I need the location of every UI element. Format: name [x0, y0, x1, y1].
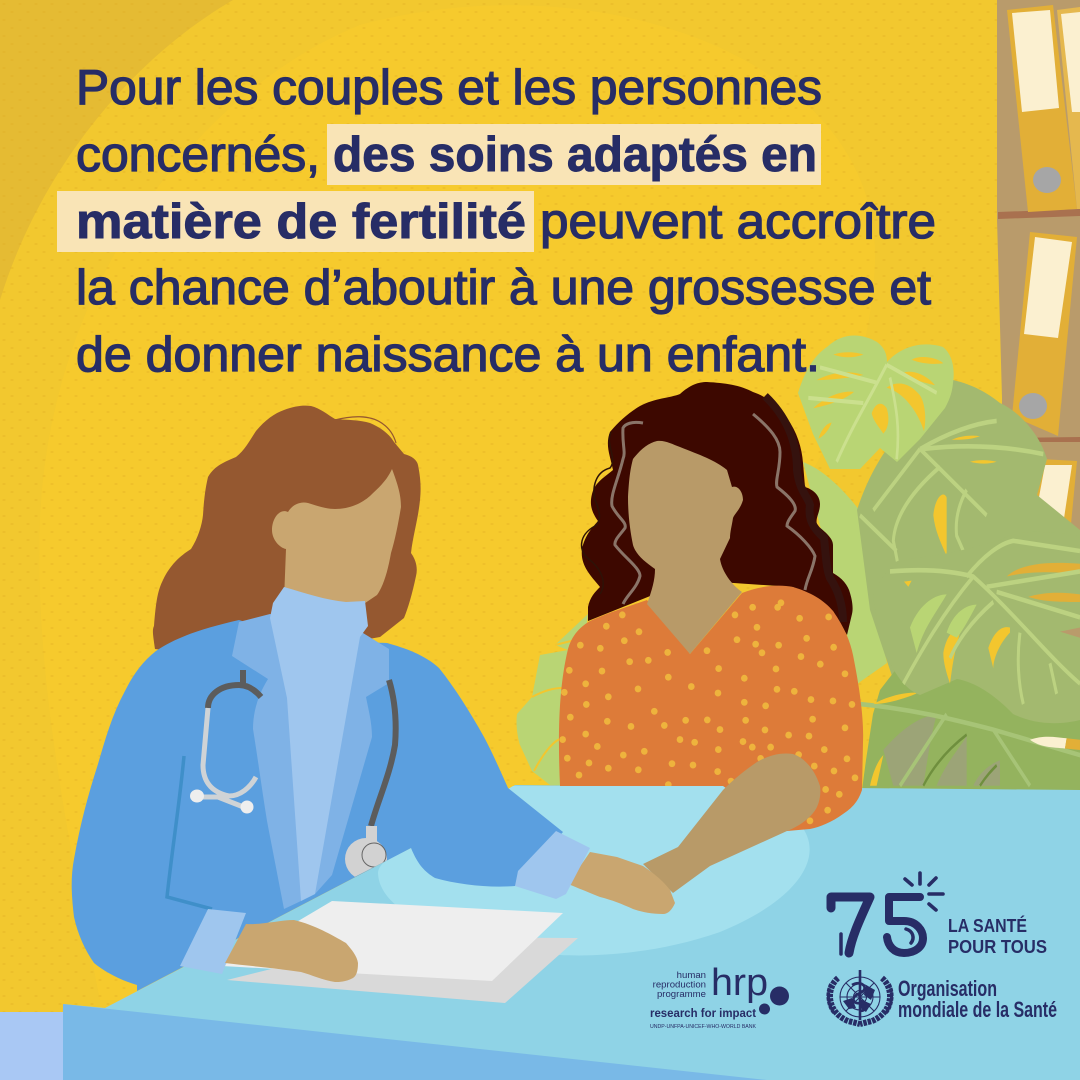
doctor — [72, 406, 563, 991]
shelf boards — [998, 209, 1080, 442]
programme name: reproduction — [653, 980, 706, 990]
lapels — [232, 614, 389, 909]
forearm — [643, 753, 820, 893]
continents — [843, 985, 875, 1012]
slogan: LA SANTÉ — [948, 915, 1027, 936]
numeral 5 — [887, 897, 923, 953]
hair — [582, 382, 853, 635]
table highlight — [378, 786, 810, 955]
doctor right hand and cuff — [515, 831, 675, 914]
ear tips — [190, 790, 204, 802]
monstera plant — [517, 336, 1080, 790]
logo: WHO emblem — [828, 970, 1057, 1024]
hair — [153, 406, 421, 660]
organisation name: Organisation — [898, 976, 997, 1001]
globe — [840, 977, 880, 1017]
shelf back — [997, 0, 1080, 800]
rays — [905, 873, 943, 910]
hair strands — [612, 414, 815, 604]
pocket — [167, 756, 212, 909]
face — [272, 469, 401, 620]
research for impact: research for impact — [650, 1006, 756, 1020]
logo: WHO 75 years — [831, 873, 1047, 957]
heading text: des soins adaptés en — [333, 128, 817, 182]
tube left — [208, 670, 261, 708]
leaf: bottom — [860, 668, 1080, 790]
heading text: Pour les couples et les personnes — [76, 61, 822, 115]
binaurals — [196, 708, 256, 808]
numeral 7 accent — [839, 934, 843, 954]
dots — [759, 986, 789, 1014]
binder 1 — [1007, 5, 1077, 212]
staff and serpent — [852, 970, 867, 1020]
doctor left hand and cuff — [180, 909, 358, 982]
leaf: top light — [798, 336, 954, 469]
patient — [559, 382, 863, 893]
highlight boxes — [57, 124, 821, 252]
title — [57, 61, 936, 382]
blouse dots — [559, 599, 858, 824]
white sheet — [222, 901, 563, 981]
stethoscope — [190, 670, 396, 880]
numeral 7 — [831, 897, 870, 953]
hrp letters: hrp — [711, 962, 768, 1004]
leaf: light back right — [803, 462, 897, 684]
floor corner — [0, 1012, 63, 1080]
heading text — [76, 61, 936, 382]
paper sheets — [222, 901, 578, 1003]
hair curl — [335, 417, 396, 443]
heading text: peuvent accroître — [540, 195, 936, 249]
heading text: matière de fertilité — [76, 195, 526, 249]
partners: UNDP-UNFPA-UNICEF-WHO-WORLD BANK — [650, 1024, 756, 1030]
leaf: large front — [873, 532, 1080, 723]
table — [62, 785, 1080, 1080]
blouse — [559, 586, 863, 831]
leaf: middle — [857, 380, 1080, 700]
chest piece — [345, 826, 387, 880]
binder 3 — [1012, 232, 1077, 436]
heading text: la chance d’aboutir à une grossesse et — [76, 261, 931, 315]
laurels — [830, 978, 890, 1024]
binder 2 — [1057, 7, 1080, 209]
table front edge — [62, 1004, 767, 1080]
leaf: far left — [517, 614, 588, 786]
lab coat — [72, 620, 563, 991]
shelf with binders — [997, 0, 1080, 800]
tube right — [371, 680, 396, 826]
programme name: programme — [657, 989, 706, 1000]
inner scarf — [270, 587, 368, 901]
logo: HRP — [650, 962, 789, 1030]
heading text: de donner naissance à un enfant. — [76, 328, 820, 382]
programme name: human — [677, 970, 706, 981]
table top — [63, 785, 1080, 1080]
numeral 5 accent — [906, 929, 913, 943]
grey sheet — [227, 937, 578, 1003]
hair flyaway — [582, 432, 613, 594]
slogan: POUR TOUS — [948, 937, 1047, 957]
hair shading — [765, 396, 843, 622]
face and neck — [628, 441, 743, 654]
heading text: concernés, — [76, 128, 320, 182]
binder 4 — [1020, 459, 1077, 640]
